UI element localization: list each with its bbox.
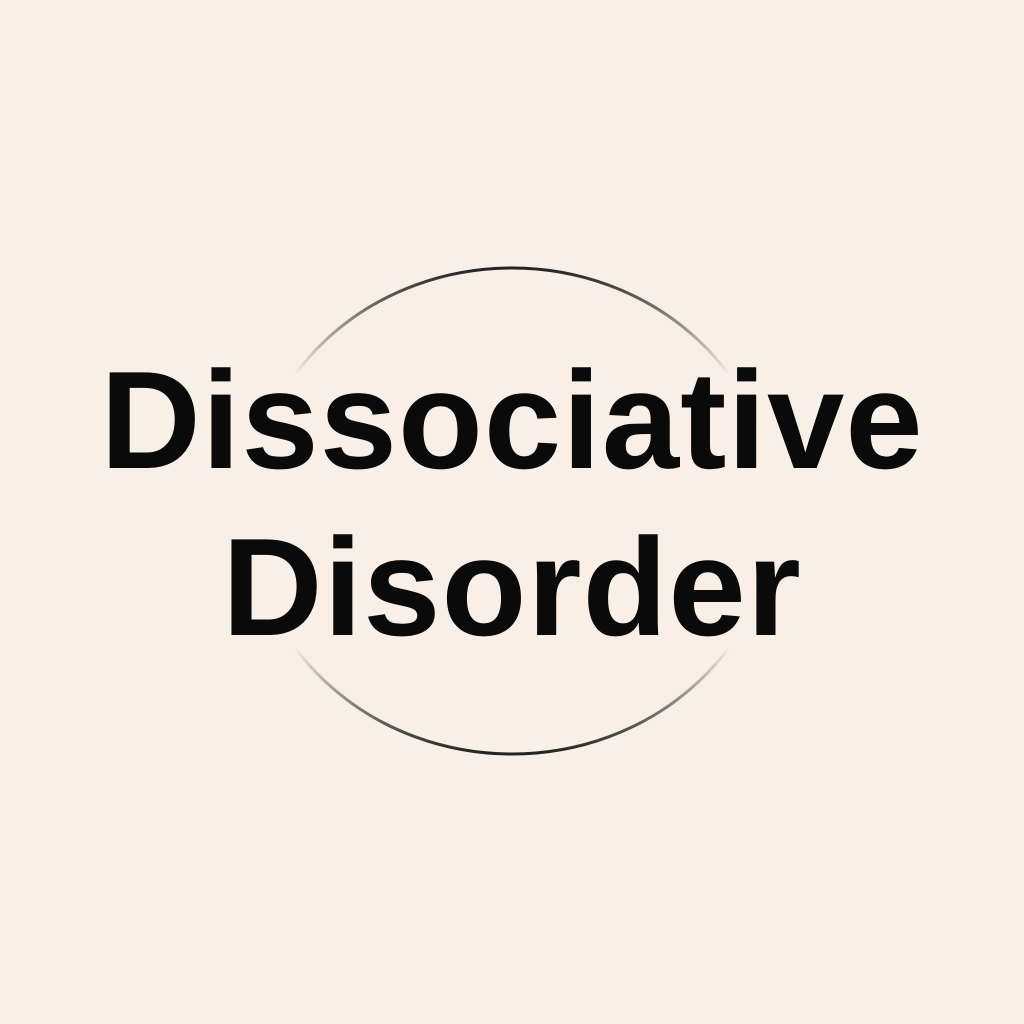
title line 1: Dissociative <box>100 343 924 498</box>
title line 2: Disorder <box>222 510 802 665</box>
